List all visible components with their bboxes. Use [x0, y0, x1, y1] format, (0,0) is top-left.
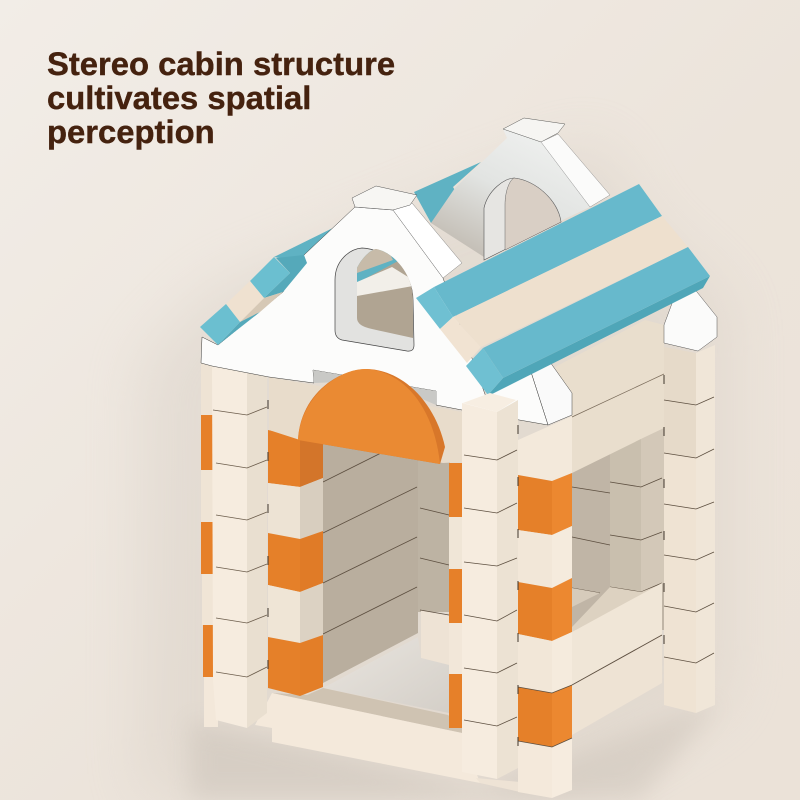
left roof end [200, 255, 307, 345]
front beam [255, 688, 520, 792]
back inner wall [418, 430, 450, 665]
title: perception [47, 113, 215, 150]
front gable panel [201, 186, 548, 425]
orange and cream column left [268, 400, 323, 696]
front right column orange and cream [518, 416, 572, 798]
arch door lintel [298, 369, 445, 464]
left inner wall [323, 430, 418, 683]
right wall upper beams [555, 320, 664, 473]
right outer column [664, 345, 715, 713]
title: Stereo cabin structure [47, 45, 395, 82]
title [47, 45, 395, 150]
rear gable panel [414, 118, 610, 260]
front wall above door [269, 377, 462, 463]
window post [610, 420, 664, 592]
right wall lower beams [572, 583, 664, 735]
illustration: stereo cabin [110, 118, 800, 800]
middle back orange strip [449, 463, 462, 728]
floor [323, 637, 449, 713]
right wall window interior [572, 430, 664, 630]
title: cultivates spatial [47, 79, 311, 116]
front left post [212, 349, 267, 728]
right roof tab white [531, 287, 717, 425]
gable window [334, 248, 414, 352]
left outer small column [201, 360, 218, 727]
front middle post [462, 393, 518, 779]
teal sliver behind front gable [274, 222, 345, 262]
right roof [416, 184, 710, 395]
